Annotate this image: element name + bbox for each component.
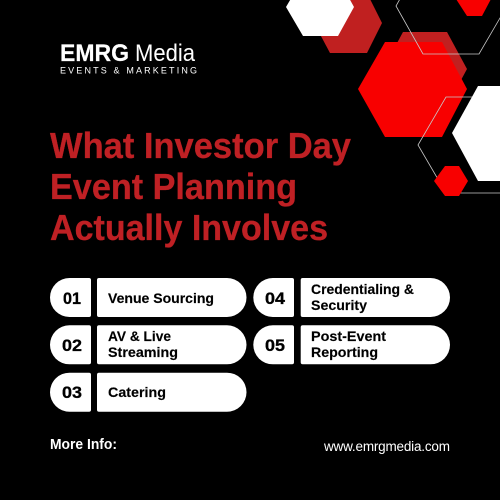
item 02: [50, 325, 246, 364]
item 02: AV & Live: [108, 328, 171, 344]
item 01: 01: [63, 290, 81, 308]
title: Event Planning: [50, 166, 297, 207]
item 03: Catering: [108, 384, 166, 400]
item 04: [253, 278, 450, 317]
title: [50, 125, 351, 248]
logo: EMRG: [60, 40, 129, 67]
item 05: Reporting: [311, 344, 378, 360]
item 04: 04: [265, 290, 286, 308]
item 04: Security: [311, 297, 367, 313]
item 03: 03: [62, 384, 82, 402]
item 05: 05: [265, 337, 285, 355]
more info label: More Info:: [50, 437, 117, 453]
logo: EVENTS & MARKETING: [60, 66, 197, 76]
item 03: [50, 373, 246, 412]
item 05: [253, 325, 450, 364]
item 01: [50, 278, 246, 317]
title: Actually Involves: [50, 207, 328, 248]
item 05: Post-Event: [311, 328, 386, 344]
item 01: Venue Sourcing: [108, 290, 214, 306]
website url: www.emrgmedia.com: [323, 439, 450, 454]
item 02: 02: [62, 337, 82, 355]
item 02: Streaming: [108, 344, 178, 360]
hexagon cluster decoration: [286, 0, 500, 196]
logo: [60, 40, 197, 76]
item 04: Credentialing &: [311, 281, 414, 297]
logo: Media: [135, 40, 196, 67]
title: What Investor Day: [50, 125, 351, 166]
